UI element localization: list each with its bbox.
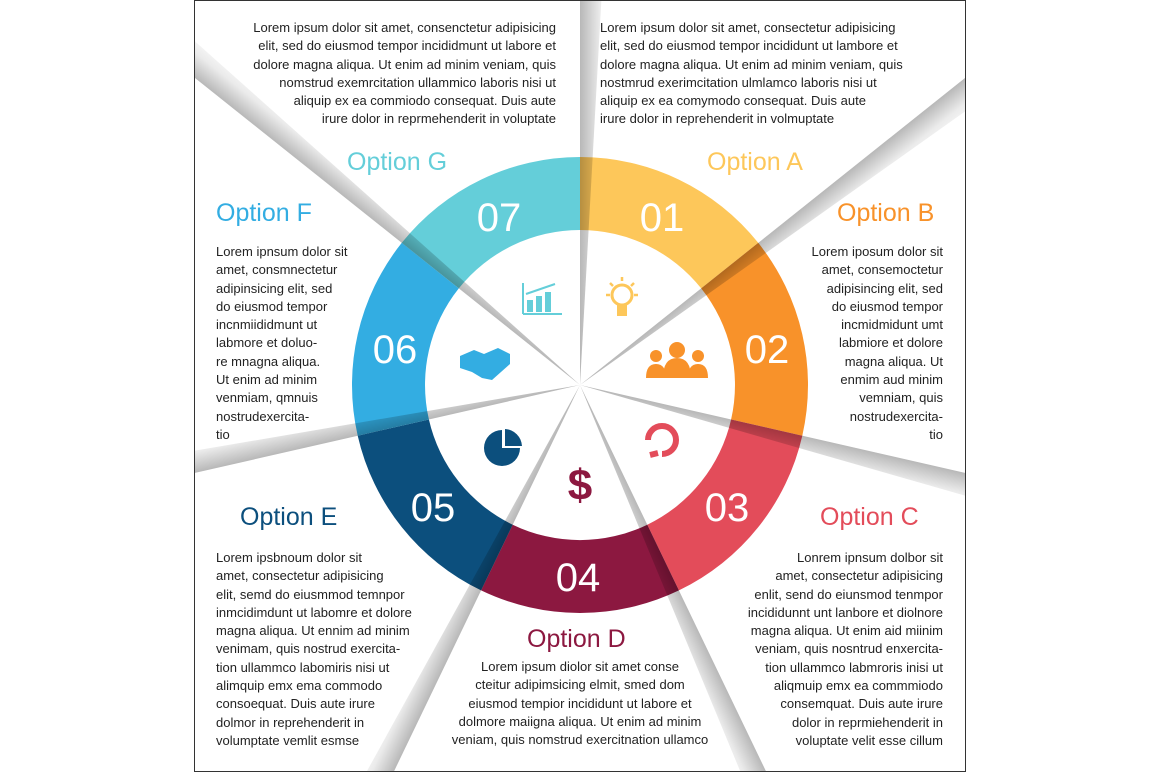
text: B: vemniam, quis bbox=[859, 390, 943, 405]
text: G: aliquip ex ea commiodo consequat. Duis aute bbox=[294, 93, 556, 108]
text: F: incnmiididmunt ut bbox=[216, 317, 317, 332]
text: E: elit, semd do eiusmmod temnpor bbox=[216, 587, 405, 602]
text: D: dolmore maiigna aliqua. Ut enim ad minim bbox=[459, 714, 701, 729]
heading: Option C: Option C bbox=[820, 503, 919, 531]
text: D: cteitur adipimsicing elmit, smed dom bbox=[475, 677, 685, 692]
text: E: venimam, quis nostrud exercita- bbox=[216, 641, 400, 656]
text: C: Lonrem ipnsum dolbor sit bbox=[797, 550, 943, 565]
text: F: do eiusmod tempor bbox=[216, 299, 327, 314]
text: B: magna aliqua. Ut bbox=[845, 354, 943, 369]
heading: Option E: Option E bbox=[240, 503, 337, 531]
text: E: volumptate vemlit esmse bbox=[216, 733, 359, 748]
heading: Option A: Option A bbox=[707, 148, 803, 176]
numbers: 06 bbox=[373, 328, 417, 372]
text: C: incididunnt unt lanbore et diolnore bbox=[748, 605, 943, 620]
text: B: enmim aud minim bbox=[840, 372, 943, 387]
text: C: tion ullammco labmroris inisi ut bbox=[765, 660, 943, 675]
text: A: Lorem ipsum dolor sit amet, consectetur adipisicing bbox=[600, 20, 896, 35]
heading: Option F: Option F bbox=[216, 199, 312, 227]
icon: pie chart bbox=[484, 429, 522, 466]
text: B: amet, consemoctetur bbox=[822, 262, 943, 277]
text: B bbox=[812, 244, 943, 442]
text: F: tio bbox=[216, 427, 230, 442]
text: C: voluptate velit esse cillum bbox=[796, 733, 943, 748]
text: C: consemquat. Duis aute irure bbox=[780, 696, 943, 711]
text: D: veniam, quis nomstrud exercitnation ullamco bbox=[452, 732, 708, 747]
text: D: Lorem ipsum diolor sit amet conse bbox=[481, 659, 679, 674]
numbers: 01 bbox=[640, 196, 684, 240]
icon: handshake bbox=[460, 348, 510, 380]
text: F: Lorem ipnsum dolor sit bbox=[216, 244, 348, 259]
text: B: Lorem iposum dolor sit bbox=[812, 244, 943, 259]
text: A: dolore magna aliqua. Ut enim ad minim veniam, quis bbox=[600, 57, 903, 72]
text: A: elit, sed do eiusmod tempor incididunt ut lambore et bbox=[600, 38, 898, 53]
shadows bbox=[195, 1, 965, 771]
numbers: 07 bbox=[477, 196, 521, 240]
text: E: consoequat. Duis aute irure bbox=[216, 696, 375, 711]
text: A: aliquip ex ea comymodo consequat. Duis aute bbox=[600, 93, 866, 108]
text: A: irure dolor in reprehenderit in volmuptate bbox=[600, 111, 834, 126]
heading: Option B: Option B bbox=[837, 199, 934, 227]
text: E: dolmor in reprehenderit in bbox=[216, 715, 364, 730]
text: C: aliqmuip emx ea commmiodo bbox=[774, 678, 943, 693]
text: G: elit, sed do eiusmod tempor incididmunt ut labore et bbox=[258, 38, 556, 53]
ring segments bbox=[352, 157, 808, 613]
icon: dollar: $ bbox=[568, 461, 592, 510]
text: C: magna aliqua. Ut enim aid miinim bbox=[751, 623, 943, 638]
text: C: veniam, quis nosntrud enxercita- bbox=[755, 641, 943, 656]
text: B: incmidmidunt umt bbox=[841, 317, 943, 332]
text: E: inmcidimdunt ut labomre et dolore bbox=[216, 605, 412, 620]
text: C: enlit, send do eiunsmod tenmpor bbox=[754, 587, 943, 602]
chart: segmented ring with folded shadows bbox=[194, 0, 966, 772]
numbers: 02 bbox=[745, 328, 789, 372]
text: F: re mnagna aliqua. bbox=[216, 354, 320, 369]
icon: bar chart bbox=[523, 283, 562, 314]
text: F: Ut enim ad minim bbox=[216, 372, 317, 387]
icon: cycle arrows bbox=[648, 426, 676, 455]
text: F: nostrudexercita- bbox=[216, 409, 309, 424]
text: E: magna aliqua. Ut ennim ad minim bbox=[216, 623, 410, 638]
text: E: amet, consectetur adipisicing bbox=[216, 568, 384, 583]
text: B: nostrudexercita- bbox=[850, 409, 943, 424]
text: C bbox=[748, 550, 943, 748]
text: D: eiusmod tempior incididunt ut labore et bbox=[468, 696, 692, 711]
numbers: 03 bbox=[705, 486, 749, 530]
text: B: tio bbox=[929, 427, 943, 442]
heading: Option G: Option G bbox=[347, 148, 447, 176]
text: F: adipinsicing elit, sed bbox=[216, 281, 332, 296]
text: E: Lorem ipsbnoum dolor sit bbox=[216, 550, 362, 565]
text: F: amet, consmnectetur bbox=[216, 262, 337, 277]
text: B: labmiore et dolore bbox=[839, 335, 943, 350]
text: C: amet, consectetur adipisicing bbox=[775, 568, 943, 583]
text: E: tion ullammco labomiris nisi ut bbox=[216, 660, 389, 675]
text: F bbox=[216, 244, 348, 442]
text: C: dolor in reprmiehenderit in bbox=[792, 715, 943, 730]
numbers: 04 bbox=[556, 556, 600, 600]
text: G: Lorem ipsum dolor sit amet, consenctetur adipisicing bbox=[253, 20, 556, 35]
heading: Option D: Option D bbox=[527, 625, 626, 653]
icon: lightbulb bbox=[606, 277, 638, 316]
text: D bbox=[452, 659, 708, 747]
text: G: irure dolor in reprmehenderit in voluptate bbox=[322, 111, 556, 126]
text: F: venmiam, qmnuis bbox=[216, 390, 318, 405]
text: A: nostmrud exerimcitation ulmlamco laboris nisi ut bbox=[600, 75, 877, 90]
text: B: do eiusmod tempor bbox=[832, 299, 943, 314]
numbers bbox=[373, 196, 789, 600]
text: F: labmore et doluo- bbox=[216, 335, 317, 350]
text: E: alimquip emx ema commodo bbox=[216, 678, 382, 693]
text: B: adipisincing elit, sed bbox=[827, 281, 943, 296]
numbers: 05 bbox=[411, 486, 455, 530]
text: G: dolore magna aliqua. Ut enim ad minim veniam, quis bbox=[253, 57, 556, 72]
text: G: nomstrud exemrcitation ullammico laboris nisi ut bbox=[279, 75, 556, 90]
text: A bbox=[600, 20, 903, 126]
text: E bbox=[216, 550, 412, 748]
text: G bbox=[253, 20, 556, 126]
icon: people bbox=[646, 342, 708, 378]
